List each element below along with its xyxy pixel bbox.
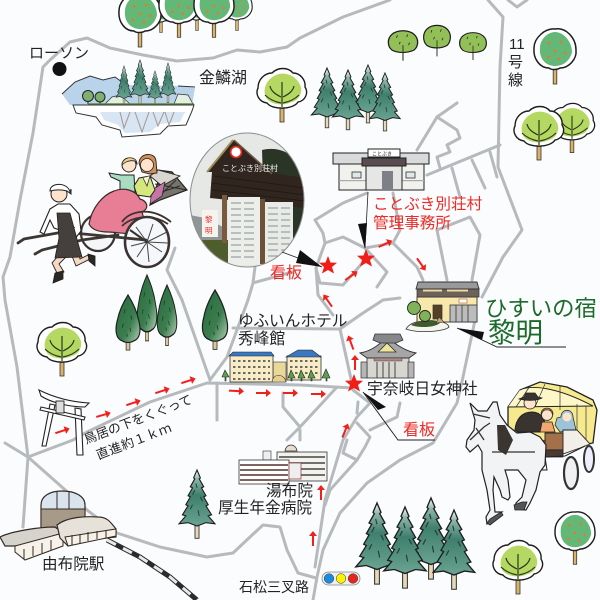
label: Kotobuki Bessoumura office: ことぶき別荘村 xyxy=(373,195,483,213)
railway xyxy=(107,540,197,600)
driver xyxy=(515,393,546,432)
label: Yufuin Kosei Nenkin Hospital: 厚生年金病院 xyxy=(218,499,312,517)
label: Yufuin station: 由布院駅 xyxy=(42,555,105,573)
illustration: torii gate xyxy=(39,390,89,455)
label: Yufuin Kosei Nenkin Hospital: 湯布院 xyxy=(266,482,313,500)
label: Kinrin lake: 金鱗湖 xyxy=(199,69,247,87)
shafts xyxy=(18,232,146,254)
pointer: star to signboard label xyxy=(363,392,435,440)
trees: broadleaf left xyxy=(37,322,87,376)
front wheel xyxy=(564,457,578,489)
photo: Kotobuki signboard: ことぶき別荘村 xyxy=(222,163,278,173)
main wheel xyxy=(125,217,169,267)
photo: Kotobuki signboard xyxy=(190,130,306,270)
horse xyxy=(466,402,546,524)
passengers xyxy=(540,408,576,432)
trees: small round trees xyxy=(388,25,486,61)
label: signboard: 看板 xyxy=(270,264,302,282)
trees: broadleaf bottom right xyxy=(493,540,543,594)
illustration: Lake Kinrin xyxy=(62,60,195,137)
lawson marker xyxy=(52,62,66,76)
hood xyxy=(508,382,597,446)
route arrows xyxy=(54,237,429,546)
trees: broadleaf near lake xyxy=(257,68,307,122)
building: hotel xyxy=(222,350,330,382)
trees: right fruit tree xyxy=(534,29,576,84)
carriage body xyxy=(545,433,564,450)
label: Hisui no Yado Reimei: 黎明 xyxy=(488,317,543,348)
label: go straight 1km under torii: 鳥居の下をくぐって xyxy=(82,392,194,447)
label: Yufuin Hotel Shuhokan: ゆふいんホテル xyxy=(238,312,348,330)
label: Kotobuki Bessoumura office xyxy=(373,195,483,232)
hood xyxy=(150,170,187,205)
label: Yufuin Hotel Shuhokan xyxy=(238,312,348,348)
pointer: Reimei inn label xyxy=(457,328,566,347)
rear wheel xyxy=(584,446,594,472)
passenger left xyxy=(109,158,137,192)
trees: upper firs xyxy=(311,65,400,131)
photo frame xyxy=(190,133,304,267)
label: Hisui no Yado Reimei: ひすいの宿 xyxy=(485,296,597,321)
pink body xyxy=(89,189,147,234)
label: Kotobuki Bessoumura office: 管理事務所 xyxy=(373,214,451,232)
label: Yufuin Kosei Nenkin Hospital xyxy=(218,482,313,517)
label: Hisui no Yado Reimei xyxy=(485,296,597,348)
label: route 11: 線 xyxy=(508,72,523,89)
building: Kotobuki management office xyxy=(333,149,429,190)
trees: cypress group xyxy=(116,275,228,350)
rear wheel xyxy=(81,215,115,251)
illustration: rickshaw xyxy=(18,154,187,283)
building: hospital xyxy=(239,445,327,484)
label: Ishimatsu junction: 石松三叉路 xyxy=(239,579,309,595)
building: Kotobuki management office: ことぶき xyxy=(372,150,392,158)
trees: lower firs xyxy=(356,498,475,589)
label: route 11: 11 xyxy=(509,36,525,53)
photo: Kotobuki signboard: 明 xyxy=(205,226,212,235)
building: Reimei inn xyxy=(406,282,479,332)
trees: broadleaf pair by route 11 xyxy=(514,103,595,160)
label: route 11: 号 xyxy=(508,54,523,71)
illustration: horse carriage xyxy=(466,382,597,525)
stars xyxy=(319,249,375,392)
passenger right xyxy=(134,154,157,197)
trees: single fir xyxy=(179,470,215,538)
puller xyxy=(40,184,95,283)
traffic signal xyxy=(322,572,360,585)
label: go straight 1km under torii: 直進約１ｋｍ xyxy=(94,420,174,462)
garden xyxy=(406,302,449,332)
label: Unagihime shrine: 宇奈岐日女神社 xyxy=(367,380,478,398)
label: Lawson: ローソン xyxy=(29,45,89,62)
front fender xyxy=(122,212,171,226)
illustration: Yufuin station xyxy=(0,491,116,560)
pointer: office to star xyxy=(358,192,368,249)
building: Unagihime shrine xyxy=(360,334,416,378)
photo: Kotobuki signboard: 黎 xyxy=(205,214,213,224)
label: route 11 xyxy=(508,36,525,89)
trees: bottom right fruit tree xyxy=(555,512,595,564)
trees: top fruit trees xyxy=(119,0,252,47)
label: Yufuin Hotel Shuhokan: 秀峰館 xyxy=(238,330,285,348)
label: signboard near shrine: 看板 xyxy=(403,421,435,439)
pointer: signboard photo to star xyxy=(282,250,322,267)
